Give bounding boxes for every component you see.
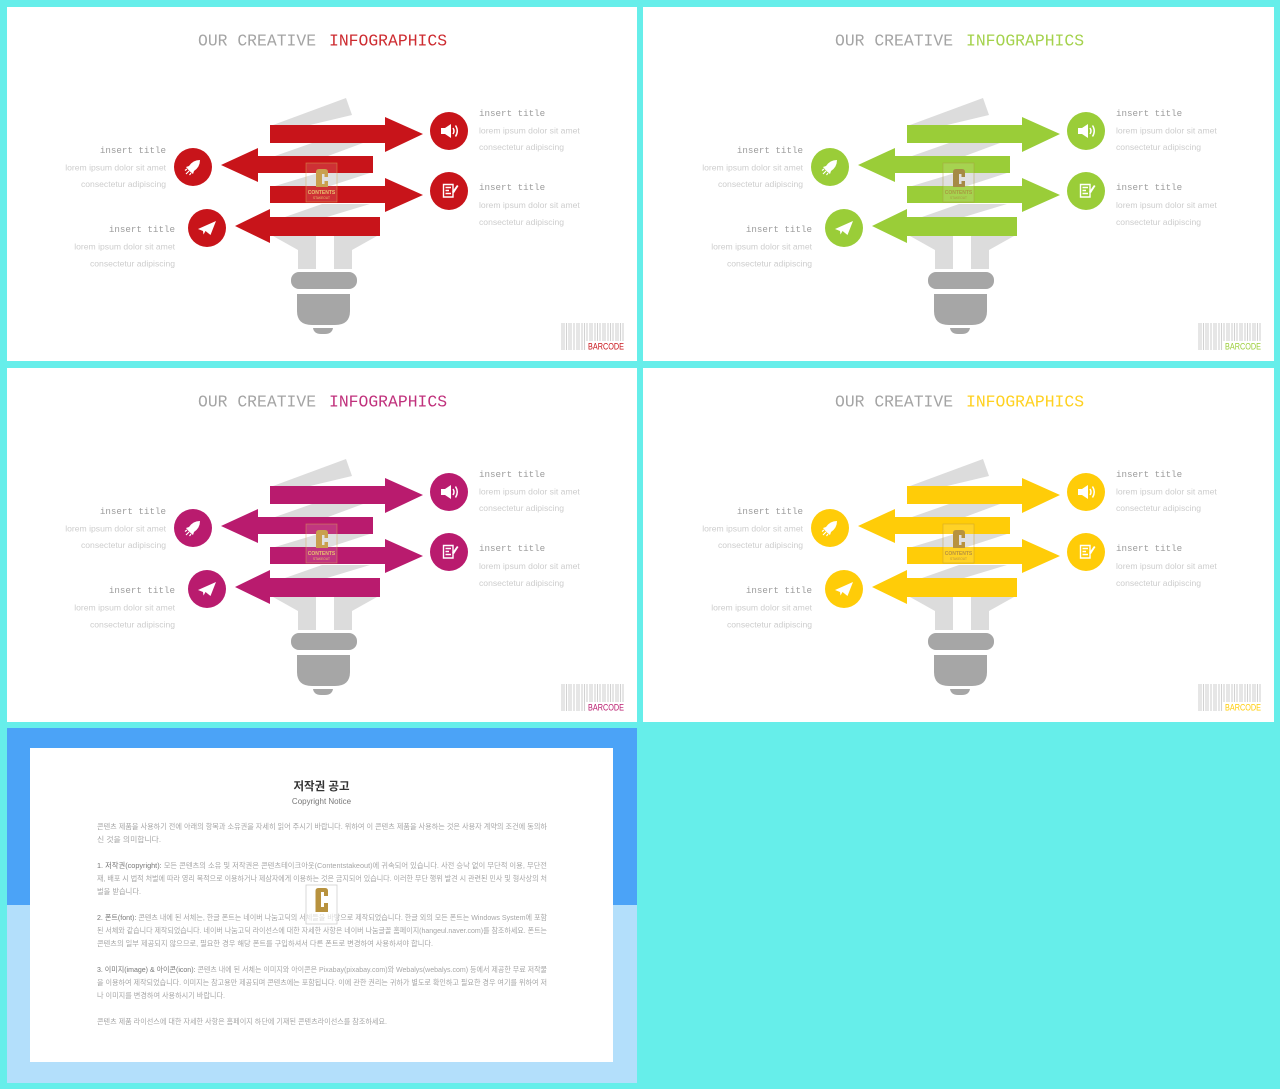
text block: lower right bbox=[1116, 543, 1217, 588]
logo watermark: CONTENTS bbox=[308, 551, 336, 557]
title: OUR CREATIVE bbox=[835, 392, 953, 412]
barcode: BARCODE bbox=[1225, 702, 1261, 714]
text block: top right: insert title bbox=[479, 469, 545, 480]
logo watermark bbox=[943, 524, 974, 563]
arrow: top right bbox=[907, 478, 1060, 513]
icon: rocket bbox=[811, 509, 849, 547]
text block: images bbox=[97, 965, 547, 1000]
text block: top right: lorem ipsum dolor sit amet bbox=[1116, 126, 1217, 136]
icon: note bbox=[430, 172, 468, 210]
text block: lower left bbox=[711, 585, 813, 630]
arrow: top right bbox=[270, 117, 423, 152]
text block: lower left: lorem ipsum dolor sit amet bbox=[74, 242, 176, 252]
panel: yellow infographic bbox=[643, 368, 1274, 722]
text block: lower left: consectetur adipiscing bbox=[90, 620, 175, 630]
logo watermark: STAKEOUT bbox=[313, 196, 330, 200]
panel: copyright notice bbox=[7, 728, 637, 1083]
arrow: upper left bbox=[221, 509, 373, 543]
text block: top right: insert title bbox=[479, 108, 545, 119]
text block: lower right: insert title bbox=[1116, 182, 1182, 193]
text block: lower left: insert title bbox=[109, 224, 175, 235]
arrow: lower right bbox=[907, 178, 1060, 212]
text block: upper left bbox=[65, 145, 167, 189]
text block: top right: consectetur adipiscing bbox=[1116, 503, 1201, 513]
icon: note bbox=[1067, 172, 1105, 210]
icon: speaker bbox=[1067, 112, 1105, 150]
arrow: lower right bbox=[907, 539, 1060, 573]
logo watermark bbox=[943, 163, 974, 202]
bulb illustration bbox=[273, 98, 377, 334]
title: INFOGRAPHICS bbox=[966, 32, 1084, 50]
text block: images: 을 이용하여 제작되었습니다. 이미지는 참고용만 제공되며 콘텐츠에는 포함됩니다. 이에 관한 권리는 귀하가 별도로 확인하고 필요한 경우 여기를 위하여 저 bbox=[97, 978, 547, 987]
title: INFOGRAPHICS bbox=[329, 32, 447, 50]
text block: upper left: insert title bbox=[737, 145, 803, 156]
text block: top right: consectetur adipiscing bbox=[1116, 142, 1201, 152]
icon: paper plane bbox=[188, 209, 226, 247]
text block: lower left bbox=[711, 224, 813, 268]
text block: upper left: lorem ipsum dolor sit amet bbox=[702, 524, 804, 534]
icon: note bbox=[430, 533, 468, 571]
bulb illustration bbox=[910, 459, 1014, 695]
text block: lower left: consectetur adipiscing bbox=[90, 258, 175, 268]
arrow: bottom left bbox=[235, 570, 380, 604]
barcode: BARCODE bbox=[588, 342, 624, 352]
panel: magenta infographic bbox=[7, 368, 637, 722]
text block: lower left: lorem ipsum dolor sit amet bbox=[74, 602, 176, 612]
text block: top right: consectetur adipiscing bbox=[479, 142, 564, 152]
text block: upper left: insert title bbox=[100, 145, 166, 156]
text block: lower left: insert title bbox=[746, 224, 812, 235]
title: INFOGRAPHICS bbox=[329, 392, 447, 412]
text block: intro bbox=[97, 822, 547, 844]
panel: green infographic bbox=[643, 7, 1274, 361]
text block: lower left: consectetur adipiscing bbox=[727, 620, 812, 630]
text block: upper left: lorem ipsum dolor sit amet bbox=[702, 162, 804, 172]
text block: upper left: lorem ipsum dolor sit amet bbox=[65, 162, 167, 172]
text block: upper left: lorem ipsum dolor sit amet bbox=[65, 524, 167, 534]
text block: lower right: consectetur adipiscing bbox=[1116, 217, 1201, 227]
text block: copyright bbox=[97, 861, 547, 896]
text block: top right bbox=[1116, 108, 1217, 152]
barcode: BARCODE bbox=[588, 702, 624, 714]
icon: rocket bbox=[174, 148, 212, 186]
text block: upper left: consectetur adipiscing bbox=[81, 179, 166, 189]
icon: rocket bbox=[811, 148, 849, 186]
logo watermark bbox=[306, 163, 337, 202]
text block: lower right bbox=[479, 182, 580, 227]
text block: lower right: consectetur adipiscing bbox=[479, 217, 564, 227]
text block: font: 콘텐츠의 일부 제공되지 않으므로, 필요한 경우 해당 폰트를 구입하셔서 다른 폰트로 변경하여 사용하셔야 합니다. bbox=[97, 939, 433, 948]
icon: speaker bbox=[430, 473, 468, 511]
text block: lower right: consectetur adipiscing bbox=[479, 578, 564, 588]
text block: lower right: insert title bbox=[479, 543, 545, 554]
text block: lower right: lorem ipsum dolor sit amet bbox=[1116, 200, 1217, 210]
text block: images: 3. 이미지(image) & 아이콘(icon): 콘텐츠 내에 된 서체는 이미지와 아이콘은 Pixabay(pixabay.com)와 Webalys(webalys.com) 등에서 제공한 무료 저작물 bbox=[97, 965, 547, 974]
arrow: upper left bbox=[858, 148, 1010, 182]
text block: license: 콘텐츠 제품 라이선스에 대한 자세한 사항은 홈페이지 하단에 기재된 콘텐츠라이선스를 참조하세요. bbox=[97, 1017, 387, 1026]
text block: top right: lorem ipsum dolor sit amet bbox=[1116, 486, 1217, 496]
text block: lower right: lorem ipsum dolor sit amet bbox=[479, 200, 580, 210]
logo watermark bbox=[306, 885, 337, 924]
icon: paper plane bbox=[825, 570, 863, 608]
text block: images: 나 이미지를 변경하여 사용하시기 바랍니다. bbox=[97, 991, 225, 1000]
text block: upper left: consectetur adipiscing bbox=[81, 540, 166, 550]
text block: upper left bbox=[65, 506, 167, 550]
text block: top right bbox=[1116, 469, 1217, 513]
icon: note bbox=[1067, 533, 1105, 571]
text block: copyright: 1. 저작권(copyright): 모든 콘텐츠의 소유 및 저작권은 콘텐츠테이크아웃(Contentstakeout)에 귀속되어 있습니다. 사전 승낙 없이 무단적 이용, 무단전 bbox=[97, 861, 547, 870]
arrow: top right bbox=[907, 117, 1060, 152]
text block: font bbox=[97, 913, 547, 948]
title: INFOGRAPHICS bbox=[966, 392, 1084, 412]
text block: upper left bbox=[702, 145, 804, 189]
text block: lower left: insert title bbox=[746, 585, 812, 596]
logo watermark: STAKEOUT bbox=[950, 557, 967, 561]
text block: top right: lorem ipsum dolor sit amet bbox=[479, 486, 580, 496]
text block: lower right: insert title bbox=[479, 182, 545, 193]
bulb illustration bbox=[273, 459, 377, 695]
text block: upper left: consectetur adipiscing bbox=[718, 540, 803, 550]
barcode bbox=[1199, 323, 1261, 352]
text block: upper left: insert title bbox=[100, 506, 166, 517]
text block: top right: lorem ipsum dolor sit amet bbox=[479, 126, 580, 136]
heading: 저작권 공고 bbox=[293, 779, 350, 793]
logo watermark bbox=[306, 524, 337, 563]
panel: red infographic bbox=[7, 7, 637, 361]
text block: top right: insert title bbox=[1116, 108, 1182, 119]
text block: top right: consectetur adipiscing bbox=[479, 503, 564, 513]
text block: intro: 신 것을 의미합니다. bbox=[97, 835, 161, 844]
text block: upper left: consectetur adipiscing bbox=[718, 179, 803, 189]
text block: top right: insert title bbox=[1116, 469, 1182, 480]
icon: speaker bbox=[1067, 473, 1105, 511]
icon: paper plane bbox=[825, 209, 863, 247]
arrow: bottom left bbox=[235, 209, 380, 243]
logo watermark: CONTENTS bbox=[308, 190, 336, 196]
logo watermark: CONTENTS bbox=[945, 190, 973, 196]
text block: intro: 콘텐츠 제품을 사용하기 전에 아래의 항목과 소유권을 자세히 읽어 주시기 바랍니다. 위하여 이 콘텐츠 제품을 사용하는 것은 사용자 계약의 조건에 동의하 bbox=[97, 822, 547, 831]
logo watermark: CONTENTS bbox=[945, 551, 973, 557]
barcode: BARCODE bbox=[1225, 342, 1261, 352]
text block: copyright: 벌을 받습니다. bbox=[97, 887, 141, 896]
arrow: top right bbox=[270, 478, 423, 513]
barcode bbox=[562, 684, 624, 714]
text block: lower right bbox=[1116, 182, 1217, 227]
arrow: bottom left bbox=[872, 570, 1017, 604]
arrow: bottom left bbox=[872, 209, 1017, 243]
text block: lower left bbox=[74, 585, 176, 630]
arrow: upper left bbox=[221, 148, 373, 182]
title: OUR CREATIVE bbox=[835, 32, 953, 50]
icon: rocket bbox=[174, 509, 212, 547]
text block: lower left: lorem ipsum dolor sit amet bbox=[711, 242, 813, 252]
subheading: Copyright Notice bbox=[292, 797, 352, 806]
text block: font: 된 서체와 같습니다 제작되었습니다. 네이버 나눔고딕 라이선스에 대한 자세한 사항은 네이버 나눔글꼴 홈페이지(hangeul.naver.com)를 참조하세요. 폰트는 bbox=[97, 926, 547, 935]
text block: copyright: 재, 배포 시 법적 처벌에 따라 영리 목적으로 이용하거나 제삼자에게 이용하는 것은 금지되어 있습니다. 이러한 무단 행위 발견 시 관련된 민사 및 형사상의 처 bbox=[97, 874, 547, 883]
text block: lower right: consectetur adipiscing bbox=[1116, 578, 1201, 588]
text block: lower right: insert title bbox=[1116, 543, 1182, 554]
logo watermark: STAKEOUT bbox=[313, 557, 330, 561]
text block: lower right bbox=[479, 543, 580, 588]
logo watermark: STAKEOUT bbox=[950, 196, 967, 200]
text block: lower left: lorem ipsum dolor sit amet bbox=[711, 602, 813, 612]
text block: lower right: lorem ipsum dolor sit amet bbox=[479, 561, 580, 571]
icon: speaker bbox=[430, 112, 468, 150]
text block: top right bbox=[479, 108, 580, 152]
text block: upper left: insert title bbox=[737, 506, 803, 517]
text block: lower left: consectetur adipiscing bbox=[727, 258, 812, 268]
barcode bbox=[562, 323, 624, 352]
title: OUR CREATIVE bbox=[198, 392, 316, 412]
text block: font: 2. 폰트(font): 콘텐츠 내에 된 서체는, 한글 폰트는 네이버 나눔고딕의 서체들을 바탕으로 제작되었습니다. 한글 외의 모든 폰트는 Windows System에 포함 bbox=[97, 913, 547, 922]
title: OUR CREATIVE bbox=[198, 32, 316, 50]
arrow: lower right bbox=[270, 178, 423, 212]
text block: lower left: insert title bbox=[109, 585, 175, 596]
text block: lower right: lorem ipsum dolor sit amet bbox=[1116, 561, 1217, 571]
arrow: lower right bbox=[270, 539, 423, 573]
icon: paper plane bbox=[188, 570, 226, 608]
text block: lower left bbox=[74, 224, 176, 268]
arrow: upper left bbox=[858, 509, 1010, 543]
barcode bbox=[1199, 684, 1261, 714]
text block: upper left bbox=[702, 506, 804, 550]
text block: top right bbox=[479, 469, 580, 513]
bulb illustration bbox=[910, 98, 1014, 334]
